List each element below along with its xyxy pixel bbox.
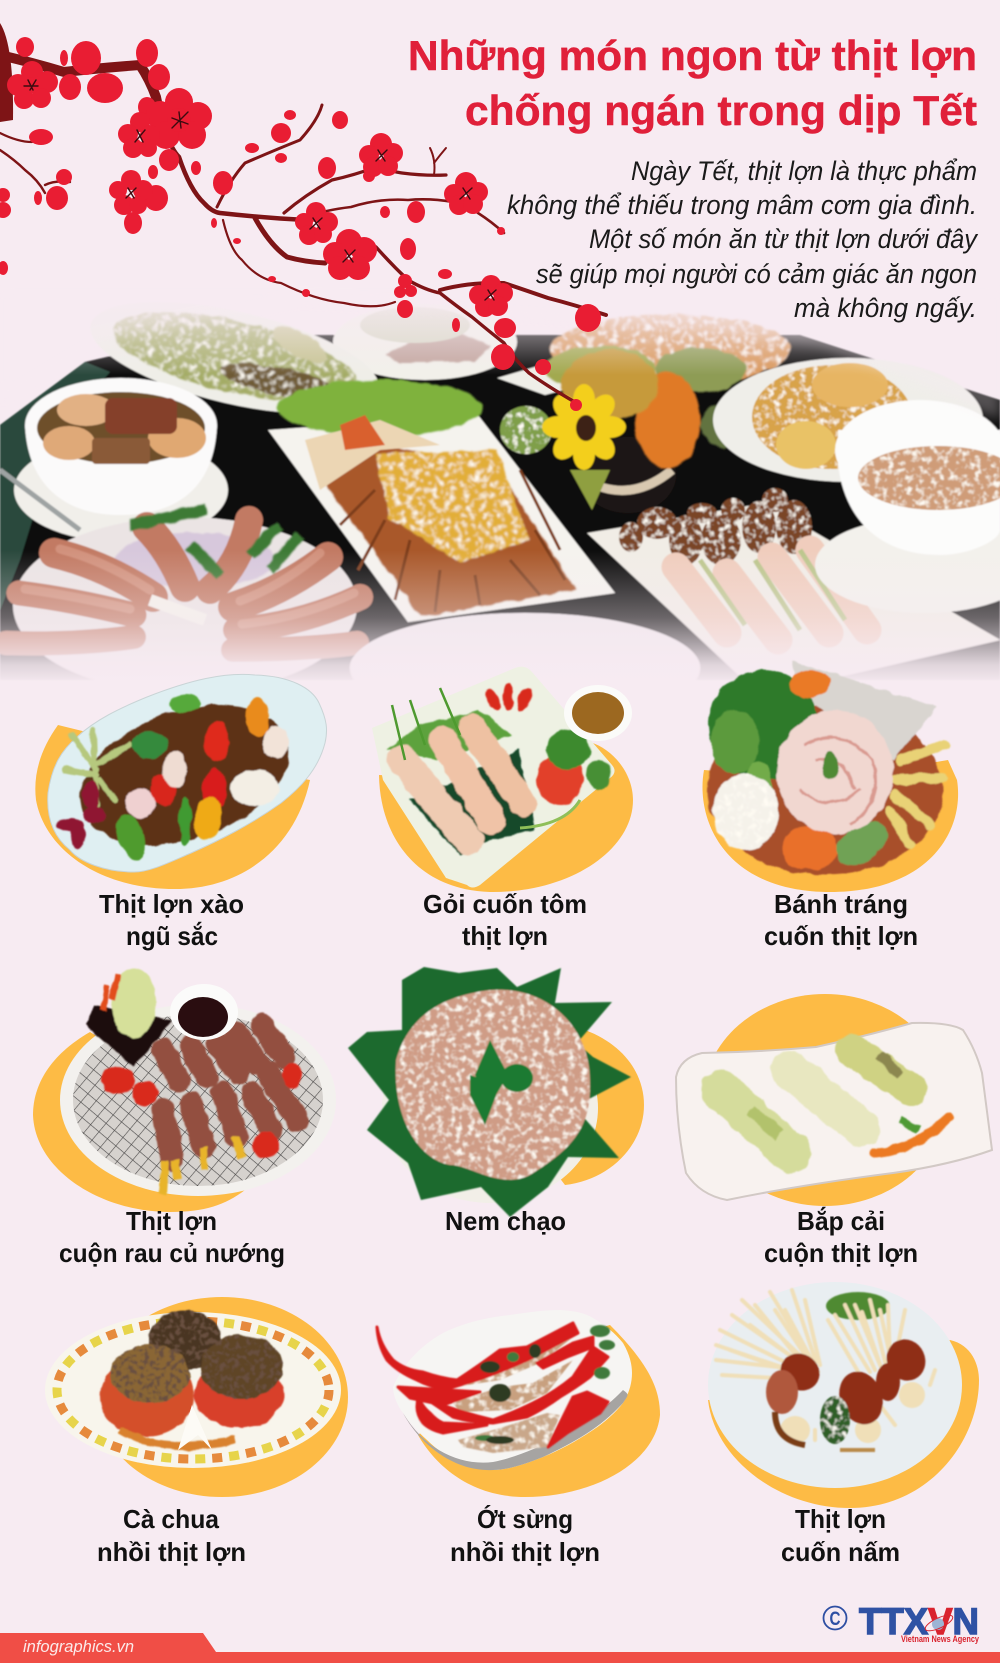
label: Ớt sừng [477,1504,573,1534]
single petals [0,37,601,411]
yellow backdrop [708,1340,979,1508]
bowl [393,1310,632,1470]
label: Thịt lợn xào [99,889,244,919]
blossom clusters [0,61,513,317]
label: cuộn thịt lợn [764,1238,918,1268]
sausage plate [6,510,360,693]
dish 8: Ớt sừng nhồi thịt lợn [377,1310,660,1567]
footer bar [0,1633,1000,1663]
stamens [24,80,496,300]
grill plate [60,1004,336,1196]
label: Bắp cải [797,1206,885,1236]
label [450,1504,600,1567]
dish 4: Thịt lợn cuộn rau củ nướng [33,968,336,1268]
intro text [507,156,978,323]
spoon [0,470,80,530]
rolls platter [587,488,1000,695]
label [764,1206,918,1268]
table surface [0,335,1000,680]
globe [923,1612,955,1634]
dish 5: Nem chạo [348,967,644,1236]
bottom centre plate [350,612,700,678]
label: nhồi thịt lợn [97,1537,246,1567]
title: chống ngán trong dịp Tết [465,87,977,134]
dish 9: Thịt lợn cuốn nấm [708,1282,979,1567]
top left tray [108,312,378,414]
label: Bánh tráng [774,889,908,919]
dish 1: Thịt lợn xào ngũ sắc [35,674,327,951]
plate [372,667,615,888]
rear right food [545,314,790,392]
label: Cà chua [123,1504,220,1534]
yellow backdrop [500,1030,644,1185]
leaves and meat [348,967,631,1217]
label: cuộn rau củ nướng [59,1238,285,1268]
label: nhồi thịt lợn [450,1537,600,1567]
logo: TTXVN [824,1601,979,1644]
intro text: Ngày Tết, thịt lợn là thực phẩm [631,156,977,186]
dish 7: Cà chua nhồi thịt lợn [45,1297,348,1567]
title [408,32,977,134]
label: ngũ sắc [126,921,218,951]
plate [45,1312,341,1468]
label [764,889,918,951]
footer text: infographics.vn [23,1637,134,1656]
yellow backdrop [96,1297,348,1497]
branches [0,55,606,405]
plate [676,1023,992,1200]
soup bowl right [815,400,1000,613]
tomatoes [100,1310,284,1446]
yellow backdrop [703,994,947,1206]
copyright mark [824,1606,846,1630]
intro text: không thể thiếu trong mâm cơm gia đình. [507,190,977,220]
tagline: Vietnam News Agency [901,1634,979,1644]
yellow backdrop [418,1325,660,1497]
photo: banquet table with dishes [0,308,1000,678]
label [423,889,587,951]
intro text: mà không ngấy. [794,293,977,323]
label: Thịt lợn [126,1206,217,1236]
flower arrangement [500,350,750,513]
copyright mark: C [830,1609,841,1630]
label: Thịt lợn [795,1504,886,1534]
yellow backdrop [379,742,633,892]
label [97,1504,246,1567]
label: cuốn thịt lợn [764,921,918,951]
intro text: Một số món ăn từ thịt lợn dưới đây [589,224,978,254]
small plates behind [496,366,564,396]
label: thịt lợn [462,921,548,951]
rolls [721,1050,950,1153]
food [56,679,308,871]
intro text: sẽ giúp mọi người có cảm giác ăn ngon [536,259,977,289]
food [386,683,610,855]
top centre plate [333,304,517,380]
label: Nem chạo [445,1206,566,1236]
label: Gỏi cuốn tôm [423,889,587,919]
plate under leaves [382,1013,598,1203]
food [86,968,302,1195]
plum blossom branch [0,23,606,411]
plate [48,674,327,872]
rear right bowl of fried food [713,358,983,482]
dish 3: Bánh tráng cuốn thịt lợn [702,660,958,951]
soup bowl left [14,378,228,542]
title: Những món ngon từ thịt lợn [408,32,977,79]
centre platter [268,380,615,622]
peppers and filling [377,1323,615,1453]
dish 2: Gỏi cuốn tôm thịt lợn [372,667,633,951]
label [59,1206,285,1268]
yellow backdrop [33,1032,245,1212]
basket and food [707,660,945,875]
wordmark: TTXVN [859,1601,979,1642]
label [781,1504,900,1567]
food [716,1290,935,1450]
label [99,889,244,951]
plate [708,1282,962,1488]
photo fades [74,306,872,372]
label: cuốn nấm [781,1537,900,1567]
yellow backdrop [35,725,310,889]
yellow backdrop [702,760,958,892]
dish 6: Bắp cải cuộn thịt lợn [676,994,992,1268]
